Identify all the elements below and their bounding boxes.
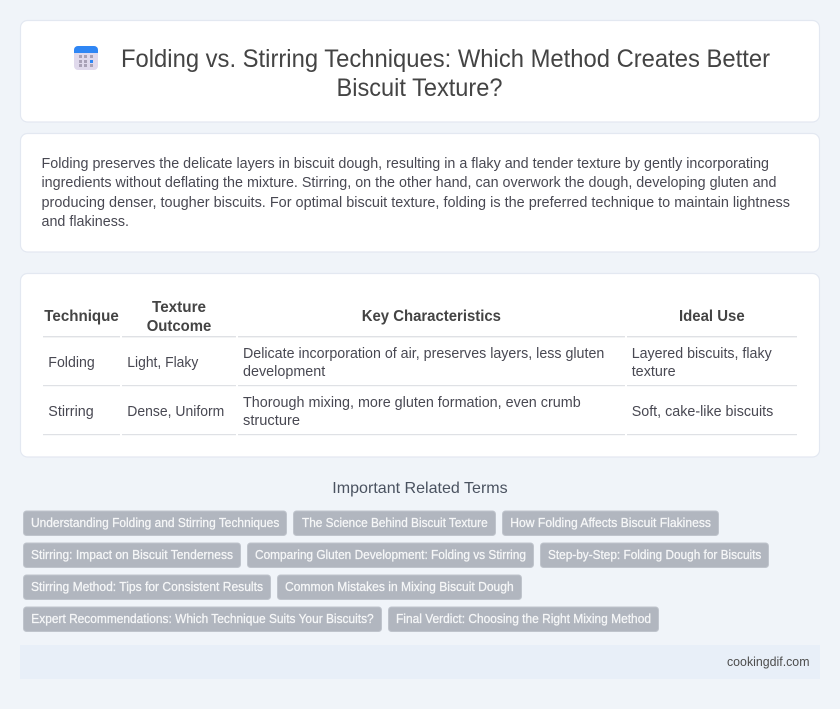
table header row: Key Characteristics (362, 308, 501, 325)
tag: Understanding Folding and Stirring Techniques (31, 516, 279, 530)
table row: folding: development (243, 363, 326, 380)
tag (24, 543, 240, 568)
tag (24, 607, 382, 632)
text block: introduction paragraph: ingredients without deflating the mixture. Stirring, on the other hand, can overwork the dough, developing gluten and (42, 174, 776, 191)
text block: introduction paragraph: and flakiness. (42, 213, 129, 230)
tag (540, 543, 768, 568)
tag (294, 511, 496, 536)
tag: How Folding Affects Biscuit Flakiness (510, 516, 711, 530)
table row: stirring: Dense, Uniform (127, 403, 224, 420)
table row: stirring: Soft, cake-like biscuits (632, 403, 773, 420)
text block: introduction paragraph: producing denser, tougher biscuits. For optimal biscuit texture, folding is the preferred technique to maintain lightness (42, 194, 790, 211)
tag (24, 511, 286, 536)
title (121, 45, 770, 102)
table row: folding: texture (632, 363, 676, 380)
tag: Comparing Gluten Development: Folding vs Stirring (255, 548, 526, 562)
text block: introduction paragraph (42, 155, 790, 230)
tag: The Science Behind Biscuit Texture (302, 516, 488, 530)
tag (502, 511, 718, 536)
table header row: Outcome (147, 318, 211, 335)
table header row: Texture (152, 299, 206, 316)
heading: important related terms: Important Related Terms (332, 480, 508, 497)
tag (278, 575, 522, 600)
table row: folding (48, 345, 772, 380)
footer (20, 645, 820, 679)
table row: folding: Light, Flaky (127, 354, 199, 371)
table row: folding: Layered biscuits, flaky (632, 345, 772, 362)
table header row: Ideal Use (679, 308, 745, 325)
tag: Expert Recommendations: Which Technique Suits Your Biscuits? (31, 612, 374, 626)
title: Biscuit Texture? (336, 74, 502, 102)
tag: Stirring: Impact on Biscuit Tenderness (31, 548, 233, 562)
tag (248, 543, 534, 568)
table row: stirring: Stirring (48, 403, 94, 420)
text block: introduction paragraph: Folding preserves the delicate layers in biscuit dough, resulting in a flaky and tender texture by gently incorporating (42, 155, 769, 172)
tag: Step-by-Step: Folding Dough for Biscuits (548, 548, 761, 562)
tag: Common Mistakes in Mixing Biscuit Dough (285, 580, 514, 594)
panel: header (20, 20, 820, 122)
tag (388, 607, 658, 632)
table row: stirring: Thorough mixing, more gluten formation, even crumb (243, 394, 581, 411)
table header row: Technique (44, 308, 119, 325)
table header row (44, 299, 745, 335)
table row: folding: Delicate incorporation of air, preserves layers, less gluten (243, 345, 604, 362)
icon: calendar (74, 46, 98, 70)
panel: introduction (20, 134, 820, 252)
tag: Stirring Method: Tips for Consistent Results (31, 580, 263, 594)
table row: folding: Folding (48, 354, 95, 371)
title: Folding vs. Stirring Techniques: Which Method Creates Better (121, 45, 770, 73)
panel: comparison table (20, 274, 820, 457)
footer source text: cookingdif.com (727, 654, 810, 669)
tag (24, 575, 270, 600)
tag list: related terms (24, 511, 768, 632)
table row: stirring: structure (243, 412, 300, 429)
table row: stirring (48, 394, 773, 429)
tag: Final Verdict: Choosing the Right Mixing Method (396, 612, 651, 626)
